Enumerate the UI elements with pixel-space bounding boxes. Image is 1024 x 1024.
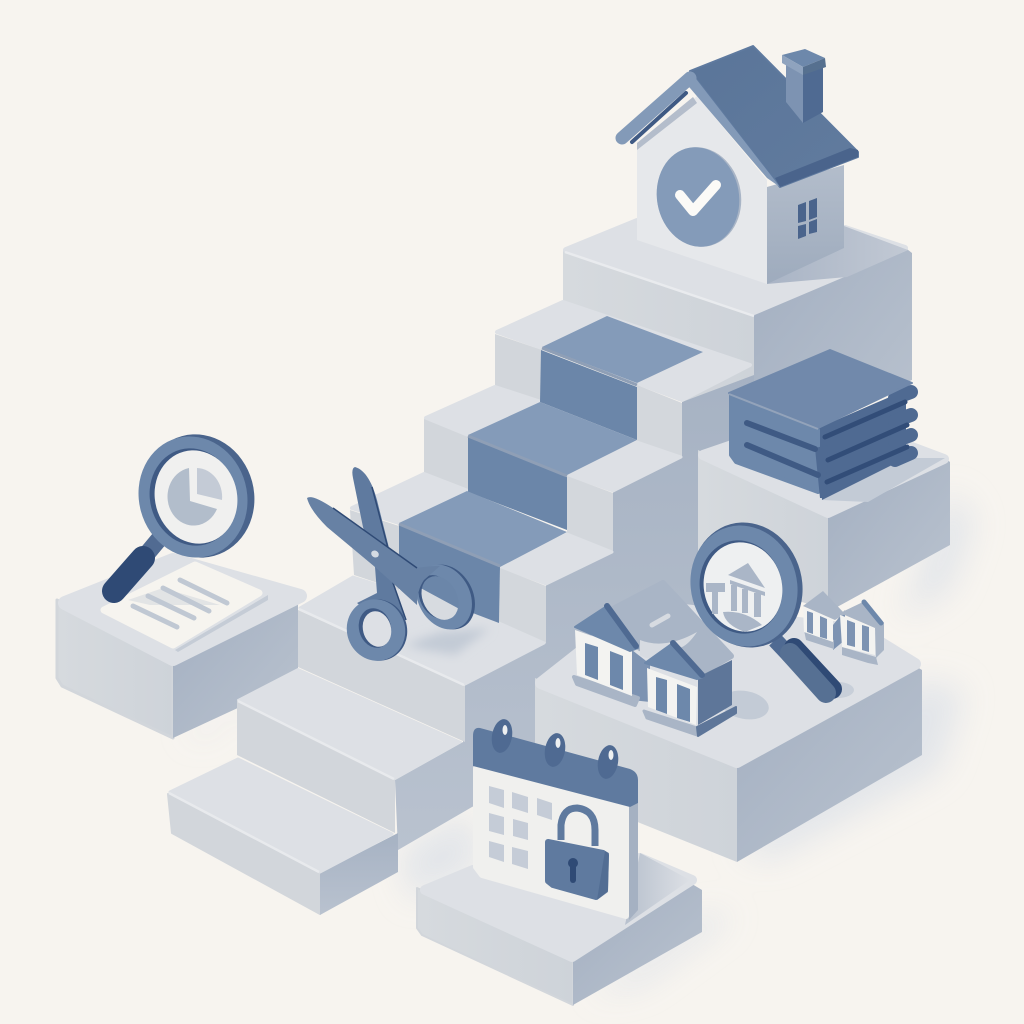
calendar page: [476, 768, 626, 916]
icon: large bank buildings: [574, 583, 736, 736]
house front wall: [637, 96, 767, 284]
step 3: [350, 474, 612, 643]
step 4: [298, 577, 544, 742]
gable trim: [622, 71, 780, 187]
lens ring: [678, 510, 816, 660]
icon: magnifying glass with pie chart: [114, 422, 268, 591]
padlock: [548, 808, 609, 900]
calendar header: [473, 728, 638, 807]
scissors shadow: [405, 628, 490, 655]
chimney: [782, 49, 826, 123]
calendar side: [629, 803, 638, 920]
house side wall: [767, 165, 844, 284]
carpet: lower tread: [399, 491, 567, 623]
panel: bottom step: [168, 759, 398, 915]
roof: [690, 46, 858, 187]
icon: house with check badge: [622, 46, 858, 284]
panel: book platform: [698, 443, 950, 612]
left side: [731, 395, 818, 492]
icon: calendar with padlock: [473, 718, 638, 920]
icon: small bank buildings: [803, 591, 884, 665]
carpet: middle tread: [468, 402, 637, 530]
icon: document: [104, 565, 259, 645]
step 1: [495, 302, 750, 457]
lens ring: [128, 422, 268, 570]
calendar date grid: [489, 786, 552, 869]
top cover: [729, 350, 912, 428]
panel: bank platform: [535, 605, 922, 862]
handle: [775, 640, 792, 658]
icon: scissors: [307, 467, 486, 669]
check badge: [649, 140, 749, 254]
window: [798, 198, 817, 239]
panel: lower step: [237, 669, 461, 833]
step 2: [424, 387, 681, 552]
panel: document platform: [57, 560, 300, 738]
handle: [145, 538, 160, 556]
left handle ring: [340, 591, 416, 669]
panel: top platform: [563, 221, 912, 450]
stair steps with blue carpet: [298, 302, 750, 742]
stair side wall: [395, 366, 760, 850]
view through right handle: [422, 576, 458, 620]
pivot: [370, 549, 380, 559]
bank in lens: [706, 563, 765, 632]
ground shadows: [180, 490, 975, 995]
right handle ring: [408, 555, 486, 639]
right side with page lobes: [818, 390, 906, 500]
panel: calendar platform: [417, 853, 702, 1005]
calendar rings: [489, 718, 621, 780]
pie chart: [168, 468, 217, 526]
carpet: top tread: [540, 316, 703, 440]
rear blade and shank: [352, 467, 405, 625]
icon: stack of books: [729, 350, 912, 500]
icon: magnifying glass over banks: [677, 510, 832, 693]
front blade: [307, 497, 440, 605]
